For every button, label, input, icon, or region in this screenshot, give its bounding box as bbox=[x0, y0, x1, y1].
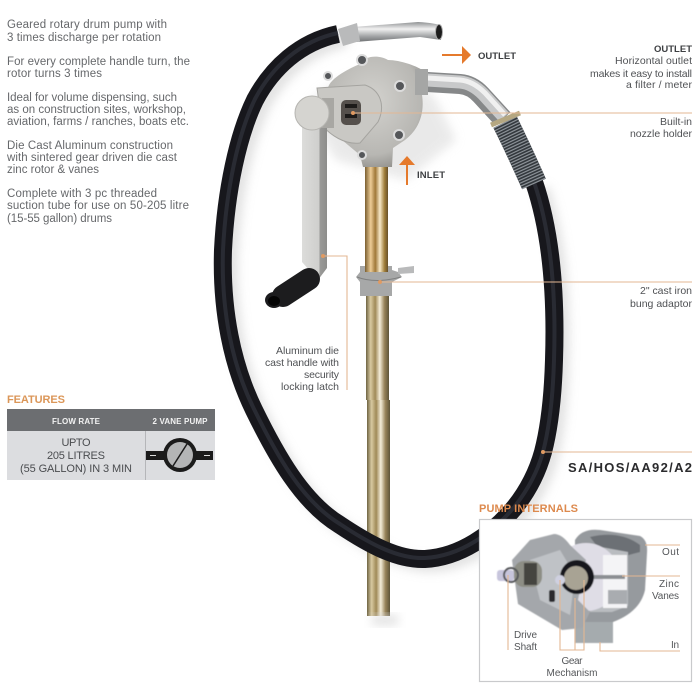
panel: features bbox=[7, 394, 215, 480]
bung adaptor bbox=[356, 264, 414, 296]
callout lines bbox=[321, 111, 692, 454]
handle bbox=[265, 96, 334, 308]
features table: UPTO bbox=[62, 437, 91, 449]
callout: nozzle holder bbox=[630, 116, 692, 140]
feature description text: For every complete handle turn, the bbox=[7, 56, 190, 68]
callout: outlet: makes it easy to install bbox=[590, 68, 692, 80]
callout: bung adaptor: 2" cast iron bbox=[640, 285, 692, 297]
internals labels: Shaft bbox=[514, 642, 537, 653]
features heading: FEATURES bbox=[7, 394, 65, 406]
features table: 205 LITRES bbox=[47, 450, 105, 462]
callout: outlet: OUTLET bbox=[654, 44, 692, 55]
feature description text: (15-55 gallon) drums bbox=[7, 213, 112, 225]
internals labels: Drive bbox=[514, 630, 537, 641]
callout: handle: cast handle with bbox=[265, 357, 339, 369]
internals labels: Zinc bbox=[659, 579, 679, 590]
feature description text: Ideal for volume dispensing, such bbox=[7, 92, 177, 104]
internals heading: PUMP INTERNALS bbox=[479, 503, 578, 515]
callout: outlet: a filter / meter bbox=[626, 79, 692, 91]
callout: handle: locking latch bbox=[281, 381, 339, 393]
callout: nozzle holder: nozzle holder bbox=[630, 128, 692, 140]
suction tube bbox=[365, 164, 398, 625]
internals labels: Vanes bbox=[652, 591, 679, 602]
feature description text: Geared rotary drum pump with bbox=[7, 19, 167, 31]
callout: handle: security bbox=[304, 369, 340, 381]
callout: bung adaptor: bung adaptor bbox=[630, 298, 692, 310]
internals labels: Out bbox=[662, 547, 679, 558]
features table: FLOW RATE bbox=[52, 417, 101, 426]
hose shadow bbox=[231, 40, 562, 565]
feature description text bbox=[6, 19, 190, 225]
features table bbox=[7, 409, 215, 480]
feature description text: 3 times discharge per rotation bbox=[7, 32, 161, 44]
callout: outlet bbox=[590, 44, 692, 91]
features table: 2 VANE PUMP bbox=[152, 417, 208, 426]
diagram: pump cutaway bbox=[497, 530, 647, 643]
feature description text: with sintered gear driven die cast bbox=[6, 152, 178, 164]
internals labels: Gear bbox=[562, 656, 583, 667]
internals callout lines bbox=[508, 545, 680, 651]
internals frame bbox=[480, 520, 692, 682]
feature description text: aviation, farms / ranches, boats etc. bbox=[7, 116, 189, 128]
callout: handle bbox=[265, 345, 340, 393]
outlet pipe bbox=[427, 78, 520, 125]
icon: 2 vane pump bbox=[146, 438, 213, 472]
internals labels bbox=[514, 547, 679, 679]
pump product photo illustration bbox=[223, 22, 562, 625]
black hose bbox=[223, 33, 554, 559]
spring guard bbox=[505, 122, 534, 184]
callout: outlet: Horizontal outlet bbox=[615, 55, 692, 67]
callout: handle: Aluminum die bbox=[276, 345, 339, 357]
feature description text: zinc rotor & vanes bbox=[7, 164, 99, 176]
pump body bbox=[317, 55, 428, 167]
internals labels: In bbox=[671, 640, 679, 651]
feature description text: Die Cast Aluminum construction bbox=[7, 140, 173, 152]
feature description text: Complete with 3 pc threaded bbox=[7, 188, 157, 200]
inlet label: INLET bbox=[417, 170, 445, 181]
feature description text: suction tube for use on 50-205 litre bbox=[7, 200, 189, 212]
pump shadow bbox=[306, 75, 456, 180]
internals labels: Mechanism bbox=[546, 668, 598, 679]
features table: (55 GALLON) IN 3 MIN bbox=[20, 463, 132, 475]
nozzle bbox=[338, 22, 442, 46]
arrow: outlet bbox=[442, 46, 471, 64]
feature description text: as on construction sites, workshop, bbox=[7, 104, 186, 116]
callout: bung adaptor bbox=[630, 285, 692, 310]
outlet label: OUTLET bbox=[478, 51, 516, 62]
arrow: inlet bbox=[399, 156, 415, 185]
callout: nozzle holder: Built-in bbox=[660, 116, 692, 128]
feature description text: rotor turns 3 times bbox=[7, 68, 102, 80]
panel: pump internals bbox=[479, 503, 692, 682]
model number: SA/HOS/AA92/A2 bbox=[568, 460, 692, 475]
